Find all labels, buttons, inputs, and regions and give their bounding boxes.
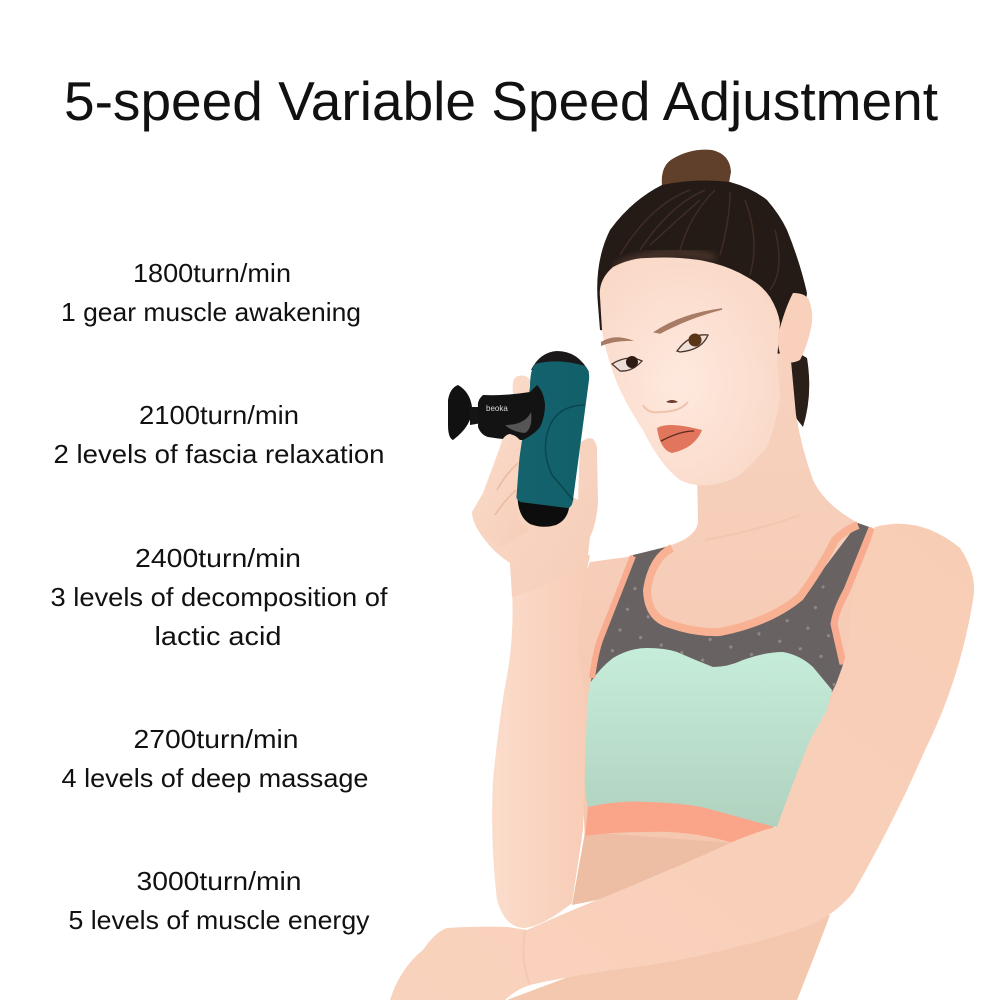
level 3 text: 3 levels of decomposition of [50, 582, 388, 612]
massager head disc [448, 385, 472, 440]
left eyebrow [601, 337, 634, 346]
title: 5-speed Variable Speed Adjustment [64, 70, 938, 132]
hair strands [620, 190, 779, 290]
right shoulder and folded arm [390, 524, 974, 1000]
mesh dots [590, 560, 845, 692]
bra coral band [585, 802, 775, 843]
bra mint cup [583, 648, 832, 827]
level 1 text: 1800turn/min [133, 258, 291, 288]
bra left strap trim [592, 556, 633, 678]
level 3 text: 2400turn/min [135, 543, 301, 573]
hand fingers [472, 434, 530, 548]
level 1 text [61, 258, 361, 327]
woman figure [390, 150, 974, 1000]
bra right strap trim [834, 528, 872, 664]
level 5 text [68, 866, 370, 935]
bra grey mesh [590, 523, 872, 692]
level 5 text: 5 levels of muscle energy [68, 905, 370, 935]
ear [778, 293, 812, 362]
massager panel outline [545, 405, 585, 500]
hairline highlight [615, 253, 715, 268]
lower body under forearm [507, 915, 830, 1000]
hair back below ear [785, 345, 809, 427]
level 2 text: 2 levels of fascia relaxation [54, 439, 384, 469]
right eye [677, 334, 708, 352]
wrist crease [523, 931, 530, 985]
brand label: beoka [486, 404, 508, 413]
level 2 text: 2100turn/min [139, 400, 299, 430]
level 3 text [50, 543, 388, 651]
palm behind massager [472, 376, 598, 597]
level 2 text [54, 400, 384, 469]
level 4 text: 2700turn/min [134, 724, 298, 754]
level 4 text: 4 levels of deep massage [62, 763, 368, 793]
massager teal body [515, 361, 589, 508]
left eye [612, 356, 642, 371]
massager bottom cap [517, 495, 573, 527]
right eyebrow [655, 309, 722, 333]
massager top cap [531, 351, 589, 372]
hair [597, 181, 807, 355]
speed levels list [50, 258, 388, 935]
neck and chest [575, 350, 873, 900]
belly between band and forearm [572, 832, 733, 905]
nose [643, 400, 688, 412]
massager neck [470, 407, 482, 425]
lips [657, 425, 702, 453]
collarbone shadow [705, 515, 800, 540]
level 1 text: 1 gear muscle awakening [61, 297, 361, 327]
holding arm [492, 555, 590, 928]
massage gun [448, 351, 589, 527]
face [600, 258, 780, 485]
level 5 text: 3000turn/min [136, 866, 302, 896]
level 4 text [62, 724, 368, 793]
hair bun [662, 150, 731, 188]
massager black arm [478, 385, 545, 440]
level 3 text: lactic acid [154, 621, 282, 651]
bra neckline trim [647, 525, 858, 632]
